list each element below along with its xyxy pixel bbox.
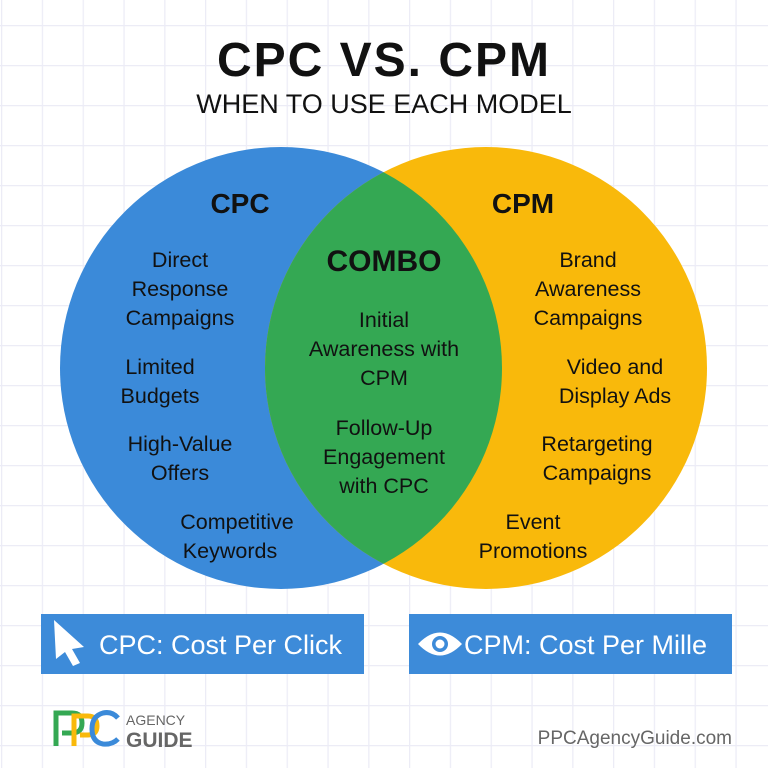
venn diagram [60, 147, 707, 589]
CPM list: Campaigns [543, 461, 651, 485]
CPM list: Campaigns [534, 306, 642, 330]
legend: CPC: CPC: Cost Per Click [99, 630, 343, 660]
combo list: CPM [360, 366, 408, 390]
logo: AGENCY [126, 712, 186, 728]
icon: cursor [54, 620, 84, 666]
combo list: Awareness with [309, 337, 459, 361]
subtitle: WHEN TO USE EACH MODEL [196, 89, 572, 119]
CPC list: Response [132, 277, 228, 301]
circle: CPC [60, 147, 502, 589]
logo [56, 712, 193, 752]
legend: CPM: CPM: Cost Per Mille [464, 630, 707, 660]
CPM list: Display Ads [559, 384, 671, 408]
CPM list [479, 248, 671, 563]
logo: GUIDE [126, 729, 193, 752]
CPC list: Budgets [121, 384, 199, 408]
heading: COMBO: COMBO [326, 245, 442, 278]
combo list: Engagement [323, 445, 445, 469]
CPC list: Competitive [180, 510, 294, 534]
legend: CPM [409, 614, 732, 674]
icon: eye [418, 632, 462, 656]
website: PPCAgencyGuide.com [538, 728, 732, 749]
CPM list: Retargeting [541, 432, 653, 456]
legend: CPC [41, 614, 364, 674]
combo list: with CPC [338, 474, 429, 498]
CPC list: Offers [151, 461, 209, 485]
CPM list: Video and [567, 355, 663, 379]
CPC list: High-Value [128, 432, 232, 456]
CPC list: Direct [152, 248, 208, 272]
circle: CPM [265, 147, 707, 589]
CPC list: Keywords [183, 539, 277, 563]
CPM list: Event [506, 510, 561, 534]
CPC list: Limited [125, 355, 195, 379]
overlap: combo [265, 172, 502, 564]
CPC list: Campaigns [126, 306, 234, 330]
title: CPC VS. CPM [217, 34, 551, 87]
combo list [309, 308, 459, 498]
CPC list [121, 248, 294, 563]
combo list: Initial [359, 308, 409, 332]
CPM list: Brand [559, 248, 617, 272]
CPM list: Promotions [479, 539, 587, 563]
combo list: Follow-Up [336, 416, 432, 440]
heading: CPM: CPM [492, 188, 554, 219]
CPM list: Awareness [535, 277, 641, 301]
heading: CPC: CPC [210, 188, 270, 219]
